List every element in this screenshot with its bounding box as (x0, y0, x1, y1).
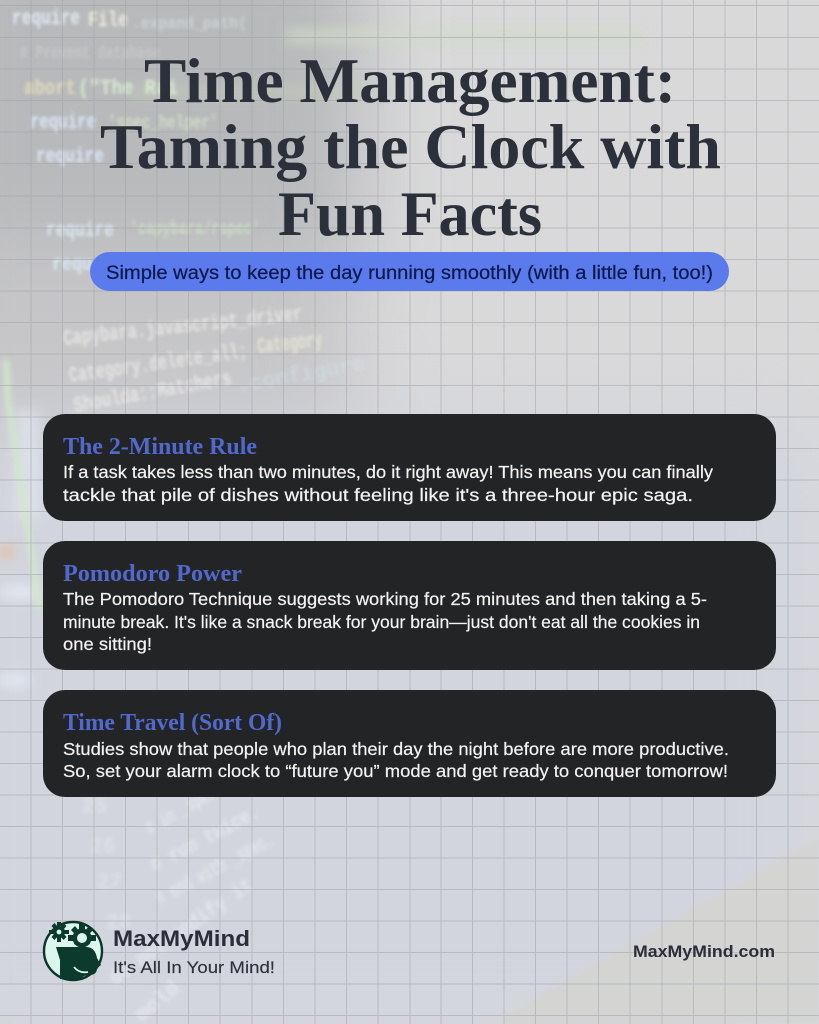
background: blurred code screen: Shoulda::Matchers (72, 366, 234, 419)
text: pomodoro power body: minute break. It's like a snack break for your brain—just don't eat all the cookies in (63, 612, 700, 632)
background: blurred code screen: require (46, 220, 114, 243)
tagline: It's All In Your Mind! (113, 958, 275, 977)
background: blurred code screen: 27 (97, 872, 122, 895)
panel: the 2-minute rule (43, 414, 776, 521)
background: blurred code screen: do not modify it (106, 874, 258, 991)
title: Time Management: (144, 46, 676, 116)
background: blurred code screen: File (88, 10, 128, 33)
text: pomodoro power body: The Pomodoro Technique suggests working for 25 minutes and then taking a 5- (63, 589, 707, 609)
text: the 2-minute rule body: tackle that pile of dishes without feeling like it's a three-hour epic saga. (63, 485, 693, 505)
background: blurred code screen: # end with _spec. (152, 830, 278, 911)
background: blurred code screen: 26 (90, 836, 115, 859)
background: blurred code screen: require (36, 146, 104, 169)
background: blurred code screen: ("The Rai (78, 78, 178, 101)
background: blurred code screen: Category (256, 328, 323, 360)
text: pomodoro power body (63, 589, 707, 654)
brand name: MaxMyMind (113, 926, 250, 951)
background: blurred code screen: require (30, 112, 96, 135)
background: blurred code screen: 25 (82, 796, 107, 819)
text: the 2-minute rule body (63, 462, 713, 505)
background: blurred code screen: # Prevent database (20, 44, 160, 64)
background: blurred code screen: .configure (235, 352, 367, 399)
background: blurred code screen: requ (52, 254, 92, 277)
panel: pomodoro power (43, 541, 776, 670)
text: time travel body: So, set your alarm clock to “future you” mode and get ready to conquer tomorrow! (63, 761, 728, 781)
background: blurred code screen: Capybara.javascript_driver (62, 302, 303, 352)
subtitle pill (90, 252, 729, 291)
title: Taming the Clock with (100, 112, 721, 182)
background: blurred code screen: 'spec_helper' (108, 112, 218, 134)
background: blurred code screen: 'capybara/rspec' (130, 218, 260, 240)
background: blurred code screen: .expand_path( (132, 15, 247, 34)
heading: the 2-minute rule: The 2-Minute Rule (63, 434, 257, 460)
title (100, 46, 721, 249)
text: the 2-minute rule body: If a task takes less than two minutes, do it right away! This means you can finally (63, 462, 713, 482)
background: blurred code screen: require (12, 8, 80, 31)
website: MaxMyMind.com (633, 943, 775, 961)
background: blurred code screen: Category.delete_all; (67, 339, 249, 389)
heading: pomodoro power: Pomodoro Power (63, 561, 242, 587)
icon: MaxMyMind logo head with gears (44, 922, 102, 980)
background: blurred code screen: abort (24, 78, 76, 101)
heading: time travel: Time Travel (Sort Of) (63, 710, 282, 736)
background: blurred code screen: # run twice. (147, 802, 264, 878)
panel: time travel (43, 690, 776, 797)
subtitle pill: Simple ways to keep the day running smoothly (with a little fun, too!) (106, 263, 713, 284)
text: time travel body: Studies show that people who plan their day the night before are more productive. (63, 739, 729, 759)
title: Fun Facts (278, 179, 542, 249)
text: pomodoro power body: one sitting! (63, 634, 152, 654)
background: blurred code screen: 28 (106, 912, 131, 935)
background: blurred code screen: # in _spec. (142, 779, 227, 841)
text: time travel body (63, 739, 729, 781)
